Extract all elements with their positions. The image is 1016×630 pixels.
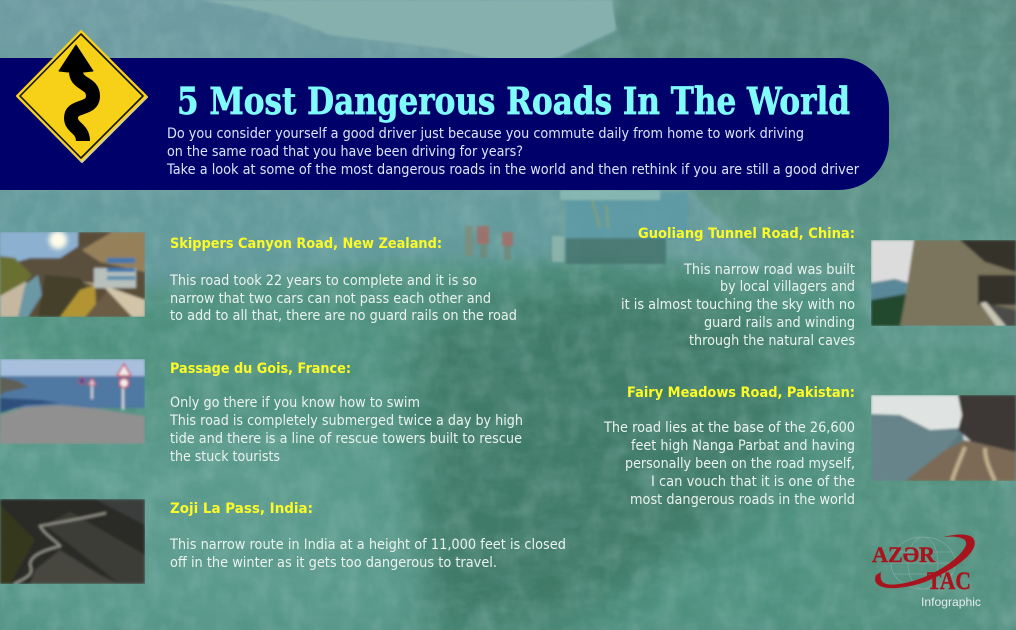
photo: Zoji La Pass (0, 499, 145, 584)
icon: winding road warning sign (17, 31, 147, 162)
photo: Guoliang Tunnel Road (871, 240, 1016, 326)
body text: feet high Nanga Parbat and having (631, 438, 855, 454)
heading: Guoliang Tunnel Road, China: (638, 226, 855, 242)
intro text: Do you consider yourself a good driver just because you commute daily from home to work driving (167, 126, 804, 142)
panel: Skippers Canyon Road (0, 231, 517, 324)
body text (169, 537, 566, 571)
photo: Passage du Gois (0, 359, 145, 444)
body text: to add to all that, there are no guard rails on the road (170, 308, 517, 324)
logo: AZERTAC Infographic (872, 534, 981, 609)
logo: AZERTAC Infographic: AZƏR (872, 542, 936, 567)
body text: the stuck tourists (170, 449, 280, 465)
logo: AZERTAC Infographic: Infographic (921, 595, 981, 609)
body text: Only go there if you know how to swim (170, 395, 420, 411)
intro text (166, 126, 859, 178)
body text: tide and there is a line of rescue towers built to rescue (170, 431, 522, 447)
body text: This narrow route in India at a height of 11,000 feet is closed (169, 537, 566, 553)
logo: AZERTAC Infographic: TAC (927, 568, 971, 595)
heading: Skippers Canyon Road, New Zealand: (170, 236, 442, 252)
heading: Fairy Meadows Road, Pakistan: (627, 385, 855, 401)
body text (621, 262, 855, 349)
body text: by local villagers and (720, 279, 855, 295)
body text (169, 395, 523, 465)
body text: This road is completely submerged twice a day by high (169, 413, 523, 429)
heading: Zoji La Pass, India: (170, 501, 313, 517)
panel: Passage du Gois (0, 359, 523, 465)
body text: through the natural caves (689, 333, 855, 349)
intro text: on the same road that you have been driving for years? (167, 144, 523, 160)
body text: I can vouch that it is one of the (651, 474, 855, 490)
body text: This road took 22 years to complete and it is so (169, 273, 477, 289)
body text: most dangerous roads in the world (630, 492, 855, 508)
body text (169, 273, 517, 324)
header banner (0, 58, 889, 190)
figures in background (465, 226, 513, 260)
photo: Fairy Meadows Road (871, 395, 1016, 481)
distant sky and ridge (200, 0, 616, 60)
body text: narrow that two cars can not pass each other and (170, 291, 491, 307)
body text: it is almost touching the sky with no (621, 297, 855, 313)
body text: off in the winter as it gets too dangerous to travel. (170, 555, 497, 571)
intro text: Take a look at some of the most dangerous roads in the world and then rethink if you are still a good driver (166, 162, 859, 178)
panel: Zoji La Pass (0, 499, 566, 584)
body text: guard rails and winding (704, 315, 855, 331)
heading: Passage du Gois, France: (170, 361, 351, 377)
photo: Skippers Canyon Road (0, 231, 145, 317)
body text: This narrow road was built (683, 262, 855, 278)
panel: Fairy Meadows Road (603, 385, 1016, 508)
body text: personally been on the road myself, (625, 456, 855, 472)
body text: The road lies at the base of the 26,600 (603, 420, 855, 436)
body text (603, 420, 855, 508)
title: 5 Most Dangerous Roads In The World (177, 79, 850, 123)
truck in background (552, 190, 688, 264)
panel: Guoliang Tunnel Road (621, 226, 1016, 349)
